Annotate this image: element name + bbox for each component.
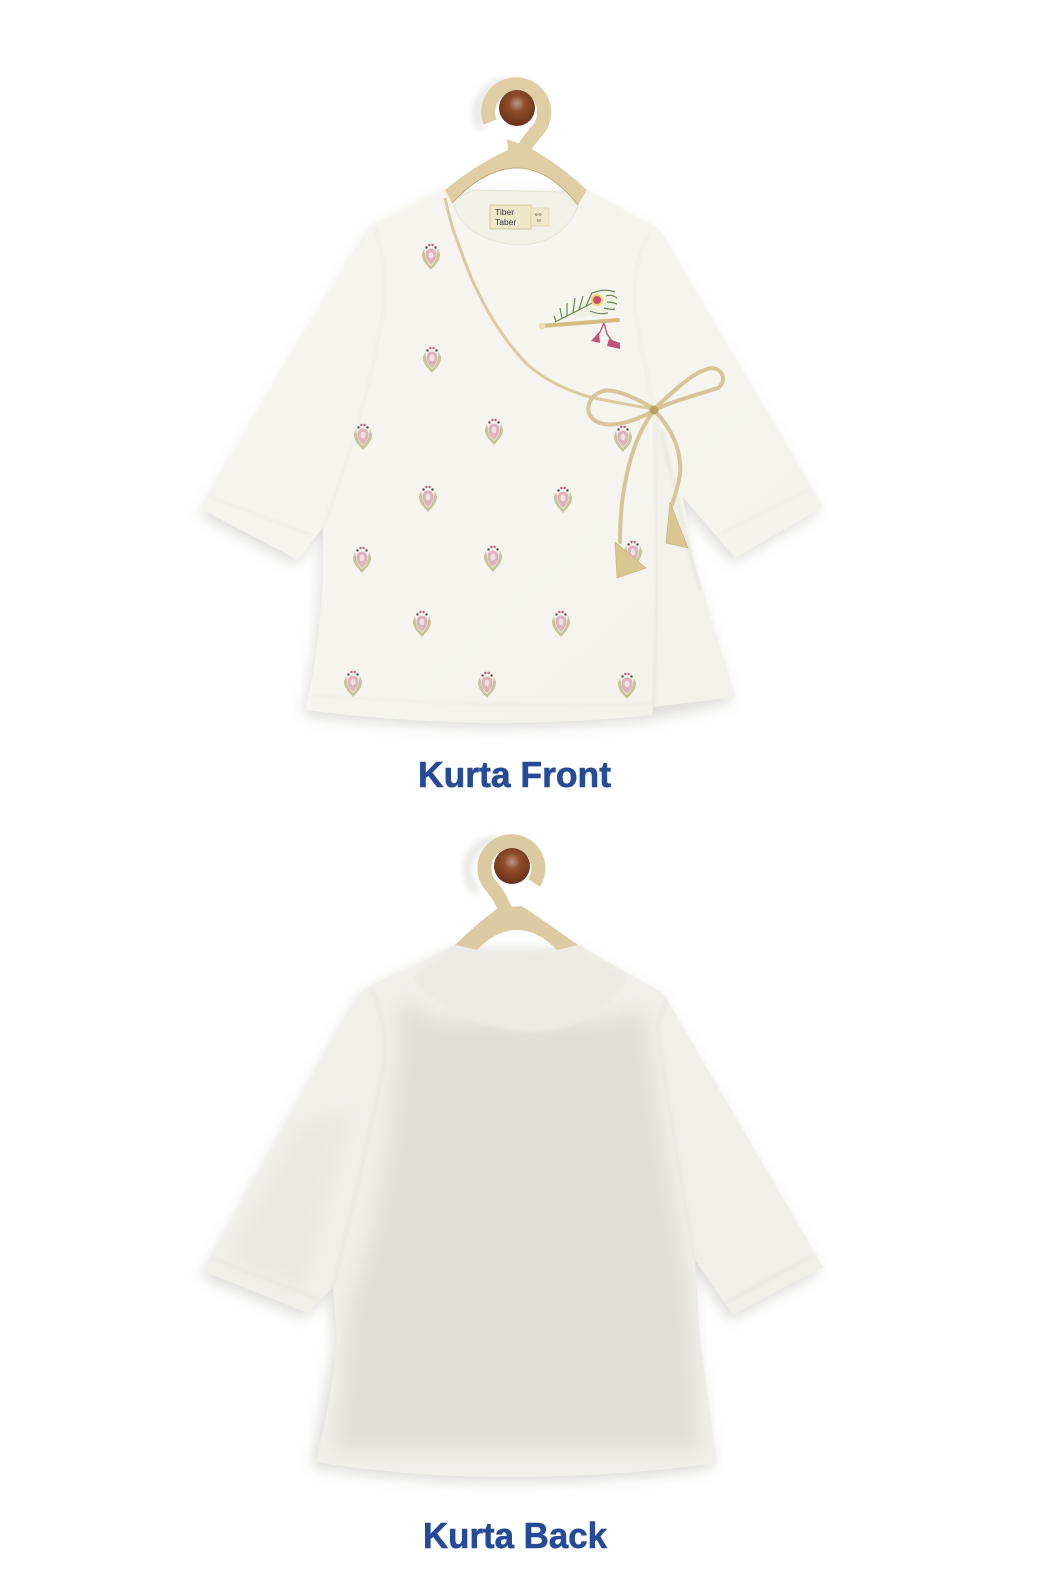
heading: Kurta Front: Kurta Front bbox=[418, 754, 611, 795]
hanger knob bbox=[494, 848, 530, 884]
bow knot bbox=[650, 406, 658, 414]
back yoke bbox=[413, 945, 627, 1032]
wooden hanger bbox=[445, 84, 587, 205]
wooden hanger bbox=[455, 841, 578, 950]
heading: Kurta Back: Kurta Back bbox=[423, 1515, 608, 1556]
peacock feather and flute embroidery bbox=[538, 290, 620, 349]
garment shadow bbox=[200, 195, 820, 728]
tassel tips bbox=[615, 502, 688, 578]
soft body shading bbox=[336, 1008, 699, 1450]
hanger knob bbox=[499, 90, 535, 126]
panel: kurta front bbox=[200, 82, 823, 728]
brand label bbox=[490, 205, 549, 229]
neckline inside bbox=[452, 190, 578, 245]
butti motifs bbox=[344, 244, 642, 699]
hanger shadow bbox=[477, 82, 506, 128]
brand label: 6-9 bbox=[535, 212, 542, 217]
tie bow bbox=[588, 368, 723, 542]
gold neckline cord bbox=[445, 198, 653, 409]
brand label: Taber bbox=[495, 217, 516, 227]
kurta back silhouette bbox=[205, 945, 823, 1477]
brand label: Tiber bbox=[495, 207, 514, 217]
panel: kurta back bbox=[202, 840, 823, 1482]
sleeve shading and seams bbox=[210, 228, 808, 705]
wrap under-layer bbox=[653, 425, 735, 707]
hanger shadow bbox=[467, 840, 495, 892]
kurta front body bbox=[203, 190, 823, 723]
garment shadow bbox=[202, 950, 820, 1482]
seams and cuff folds bbox=[212, 988, 812, 1303]
brand label: M bbox=[537, 218, 541, 223]
